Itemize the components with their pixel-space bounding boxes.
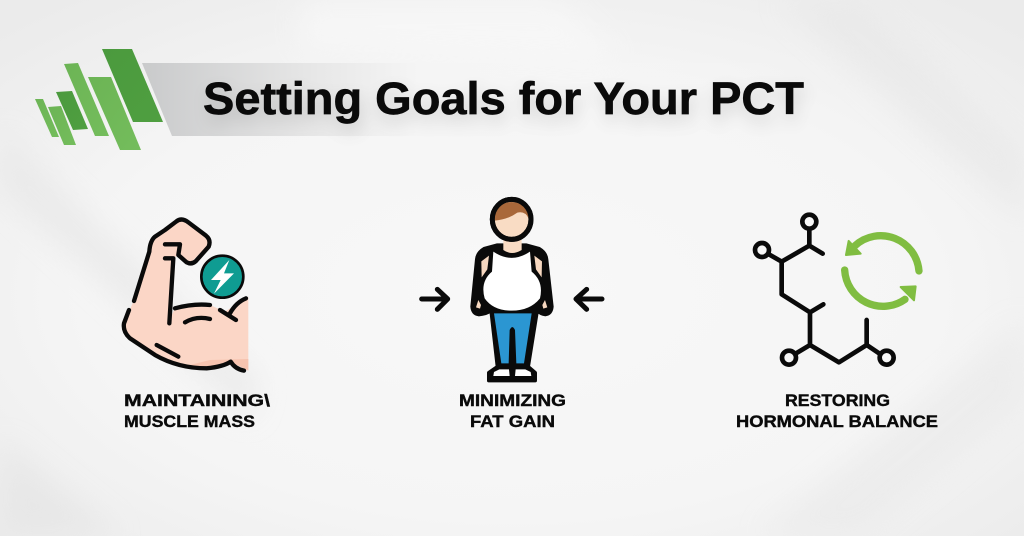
icon: lightning badge xyxy=(201,256,243,298)
title: Setting Goals for Your PCT xyxy=(203,73,804,124)
body silhouette xyxy=(472,245,552,381)
head xyxy=(492,199,531,239)
label: minimizing fat gain xyxy=(459,392,566,431)
title: Setting Goals for Your PCT xyxy=(205,81,806,132)
arm skin xyxy=(476,256,547,309)
icon: hormone molecule xyxy=(755,215,919,365)
logo: green bars xyxy=(35,49,163,150)
label: maintaining muscle mass: MUSCLE MASS xyxy=(124,413,255,431)
arrows xyxy=(422,289,602,309)
label: maintaining muscle mass: MAINTAINING\ xyxy=(124,392,271,410)
legs xyxy=(494,313,532,363)
icon: green cycle arrows xyxy=(845,236,919,306)
title banner xyxy=(142,63,800,136)
label: restoring hormonal balance: RESTORING xyxy=(785,392,890,410)
label: restoring hormonal balance: HORMONAL BALANCE xyxy=(736,413,938,431)
icon: man with belly and inward arrows xyxy=(422,199,602,381)
label: restoring hormonal balance xyxy=(736,392,938,431)
tank top xyxy=(483,252,541,311)
neck xyxy=(503,240,522,253)
icon: flexed muscle arm xyxy=(123,219,248,371)
label: minimizing fat gain: FAT GAIN xyxy=(470,413,555,431)
shoes xyxy=(493,369,531,376)
label: minimizing fat gain: MINIMIZING xyxy=(459,392,566,410)
label: maintaining muscle mass xyxy=(124,392,271,431)
